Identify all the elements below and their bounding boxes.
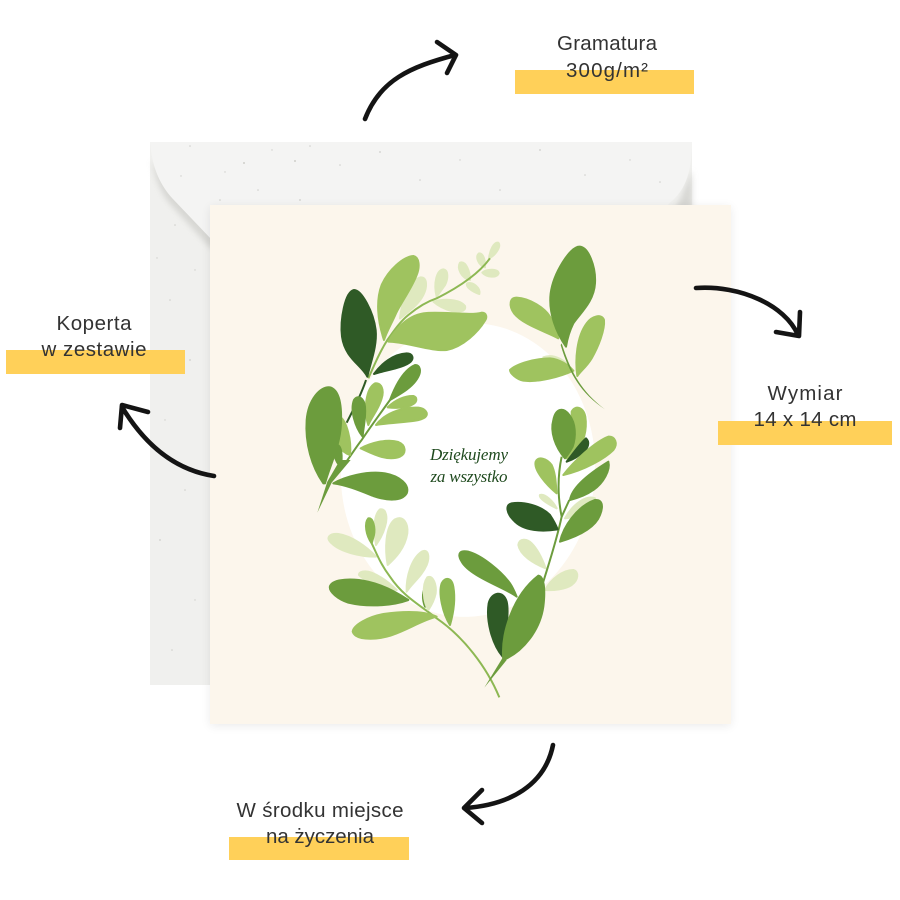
top-right branch — [510, 247, 605, 409]
wreath upper part — [306, 243, 605, 483]
callout: w środku — [229, 799, 409, 860]
right branch — [507, 408, 616, 590]
callout: koperta: Koperta — [56, 312, 132, 335]
callout: wymiar: Wymiar — [768, 382, 843, 405]
bottom-right branch — [459, 551, 544, 688]
card shadow — [210, 207, 731, 726]
card greeting — [429, 445, 508, 486]
callout: wymiar: 14 x 14 cm — [754, 408, 856, 431]
left branch tail — [317, 460, 407, 513]
arrow: wymiar — [696, 288, 800, 336]
callout: w środku: na życzenia — [266, 825, 375, 848]
callout: koperta: w zestawie — [40, 338, 146, 361]
paper speckles — [156, 145, 661, 651]
envelope — [150, 142, 692, 685]
left branch — [306, 365, 427, 483]
card greeting: Dziękujemy — [429, 445, 508, 464]
callout: wymiar — [718, 382, 892, 445]
card greeting: za wszystko — [430, 467, 508, 486]
card — [210, 205, 731, 724]
wreath lower part — [317, 408, 616, 697]
callout: gramatura: Gramatura — [557, 32, 658, 55]
envelope flap — [150, 142, 692, 240]
bottom-left branch — [329, 509, 499, 697]
callout: gramatura: 300g/m² — [566, 59, 648, 82]
arrow: w środku — [464, 745, 553, 823]
arrow: gramatura — [365, 42, 456, 119]
callout: w środku: W środku miejsce — [236, 799, 404, 822]
white circle — [329, 312, 607, 628]
callout: koperta — [6, 312, 185, 374]
arrow: koperta — [120, 405, 214, 476]
callout: gramatura — [515, 32, 694, 94]
top-left branch — [342, 243, 499, 423]
